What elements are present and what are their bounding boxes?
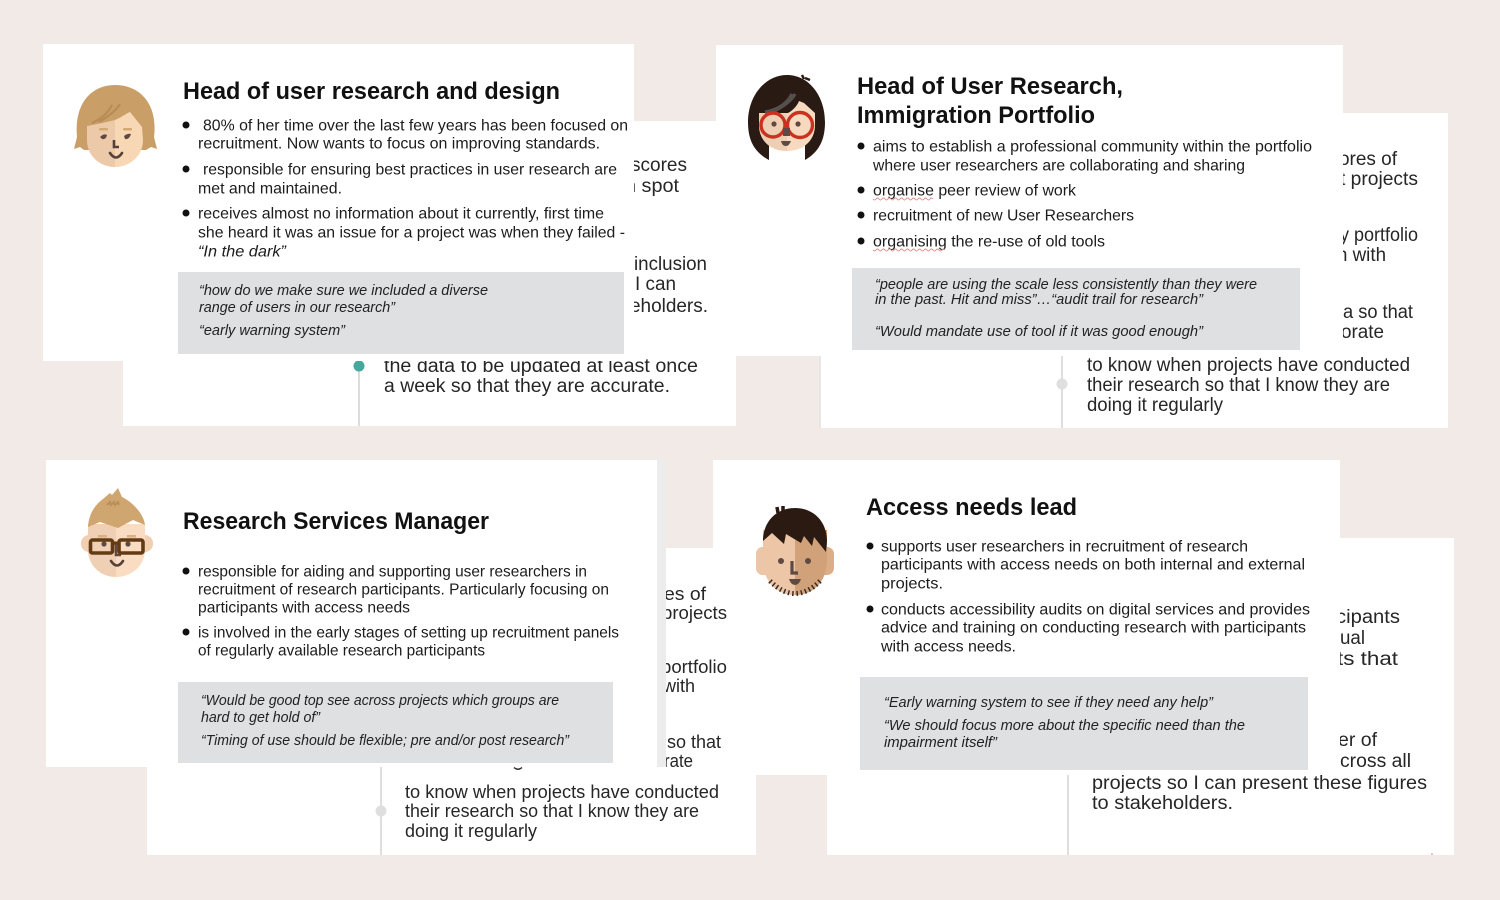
panel: back card, bottom left: so that <box>667 732 722 753</box>
text block: responsibilities: recruitment of new User Researchers <box>873 208 1134 224</box>
text block: responsibilities: aims to establish a professional community within the portfolio <box>873 138 1312 156</box>
panel: back card, top right: orate <box>1341 322 1384 343</box>
text block: responsibilities: recruitment of research participants. Particularly focusing on <box>198 582 609 598</box>
panel: back card, top right: t projects <box>1340 169 1418 190</box>
callout: quotes: “Would mandate use of tool if it was good enough” <box>875 324 1204 340</box>
panel: back card, bottom left <box>147 548 756 855</box>
panel: persona card, head of user research and design <box>43 44 634 361</box>
panel: back card, bottom left: to know when projects have conducted <box>405 782 719 803</box>
panel: back card, bottom left: with <box>662 676 695 697</box>
heading <box>857 73 1123 129</box>
text block: responsibilities: of regularly available research participants <box>198 642 485 660</box>
panel: back card, top right: to know when projects have conducted <box>1087 355 1410 376</box>
panel: persona card, access needs lead <box>713 460 1340 775</box>
callout: quotes <box>178 682 613 763</box>
text block: responsibilities <box>866 538 1310 656</box>
text block: responsibilities: supports user researchers in recruitment of research <box>881 538 1248 556</box>
panel: back card, top right <box>820 113 1448 428</box>
callout: quotes: impairment itself” <box>884 735 998 751</box>
text block: responsibilities: participants with access needs on both internal and external <box>881 556 1305 574</box>
heading: Head of user research and design <box>183 78 560 105</box>
panel: back card, bottom left: projects <box>662 603 727 624</box>
text block: responsibilities: where user researchers are collaborating and sharing <box>872 158 1245 174</box>
panel: back card, top right: ores of <box>1339 149 1398 170</box>
callout: quotes: in the past. Hit and miss”…“audit trail for research” <box>875 292 1204 308</box>
callout: quotes: hard to get hold of” <box>201 710 321 726</box>
panel: back card, bottom left: es of <box>664 584 707 605</box>
text block: responsibilities: “In the dark” <box>198 244 287 260</box>
panel: back card, bottom right: cross all <box>1340 751 1411 772</box>
panel: back card, bottom left: rate <box>664 751 693 772</box>
text block: responsibilities: 80% of her time over the last few years has been focused on <box>203 118 628 134</box>
callout: quotes <box>860 677 1308 770</box>
panel: back card, bottom left: doing it regularly <box>405 821 538 842</box>
panel: back card, top right: doing it regularly <box>1087 395 1223 416</box>
text block: responsibilities: participants with access needs <box>198 600 410 616</box>
callout: quotes: “Early warning system to see if they need any help” <box>884 695 1214 711</box>
heading: Immigration Portfolio <box>857 102 1095 129</box>
text block: responsibilities <box>858 138 1312 251</box>
text block: responsibilities: receives almost no information about it currently, first time <box>198 206 604 222</box>
panel: back card, bottom left: their research so that I know they are <box>405 801 699 822</box>
panel: back card, bottom left: portfolio <box>661 657 727 678</box>
heading: Research Services Manager <box>183 508 489 535</box>
panel: persona card, research services manager <box>46 460 666 767</box>
callout: quotes: “how do we make sure we included a diverse <box>199 283 488 299</box>
text block: responsibilities: recruitment. Now wants to focus on improving standards. <box>198 136 600 152</box>
text block: responsibilities: responsible for aiding and supporting user researchers in <box>198 564 587 580</box>
text block: responsibilities <box>182 118 628 260</box>
icon: avatar, woman with blonde bob <box>74 85 157 167</box>
panel: back card, top left: a week so that they are accurate. <box>384 376 670 397</box>
panel: back card, top left: eholders. <box>630 296 708 317</box>
callout: quotes <box>852 268 1300 350</box>
icon: avatar, man with quiff and brown glasses <box>81 488 153 577</box>
panel: back card, top right: their research so that I know they are <box>1087 375 1390 396</box>
panel: back card, top left: I can <box>635 274 676 295</box>
text block: responsibilities: is involved in the early stages of setting up recruitment panels <box>198 624 619 642</box>
text block: responsibilities: organising the re-use of old tools <box>873 234 1105 250</box>
heading: Head of User Research, <box>857 73 1123 100</box>
panel: persona card, head of user research immigration portfolio <box>716 45 1343 356</box>
icon: avatar, woman with dark hair and red glasses <box>748 75 825 160</box>
callout: quotes: range of users in our research” <box>199 300 396 316</box>
panel: back card, bottom right <box>827 538 1454 855</box>
callout: quotes <box>178 272 624 354</box>
panel: back card, top left: the data to be updated at least once <box>384 356 698 377</box>
panel: back card, top right: y portfolio <box>1340 225 1418 246</box>
panel: back card, bottom right: projects so I can present these figures <box>1092 773 1427 794</box>
text block: responsibilities: conducts accessibility audits on digital services and provides <box>881 602 1310 618</box>
panel: back card, top left <box>123 121 736 426</box>
panel: back card, bottom right: to stakeholders. <box>1092 793 1233 814</box>
text block: responsibilities: advice and training on conducting research with participants <box>881 620 1306 636</box>
heading: Access needs lead <box>866 494 1077 521</box>
text block: responsibilities: projects. <box>881 576 943 592</box>
panel: back card, bottom right: er of <box>1338 730 1378 751</box>
panel: back card, bottom right: cipants <box>1336 607 1400 628</box>
panel: back card, top left: inclusion <box>634 254 707 275</box>
callout: quotes: “We should focus more about the specific need than the <box>884 718 1245 734</box>
text block: responsibilities <box>182 564 619 660</box>
panel: back card, top left: n spot <box>625 176 680 197</box>
panel: back card, top left: scores <box>631 155 687 176</box>
panel: back card, bottom right: ts that <box>1337 649 1399 670</box>
panel: back card, top right: n with <box>1337 245 1386 266</box>
icon: avatar, man with dark hair and stubble <box>756 506 834 595</box>
callout: quotes: “Timing of use should be flexible; pre and/or post research” <box>201 733 570 749</box>
panel: back card, bottom right: ual <box>1340 628 1365 649</box>
text block: responsibilities: organise peer review of work <box>873 182 1077 200</box>
panel: back card, top right: a so that <box>1343 302 1414 323</box>
callout: quotes: “people are using the scale less consistently than they were <box>875 277 1257 293</box>
text block: responsibilities: met and maintained. <box>198 180 342 198</box>
text block: responsibilities: with access needs. <box>880 638 1016 656</box>
callout: quotes: “early warning system” <box>199 323 346 339</box>
callout: quotes: “Would be good top see across projects which groups are <box>201 693 559 709</box>
text block: responsibilities: responsible for ensuring best practices in user research are <box>203 162 617 178</box>
text block: responsibilities: she heard it was an issue for a project was when they failed - <box>198 224 625 242</box>
